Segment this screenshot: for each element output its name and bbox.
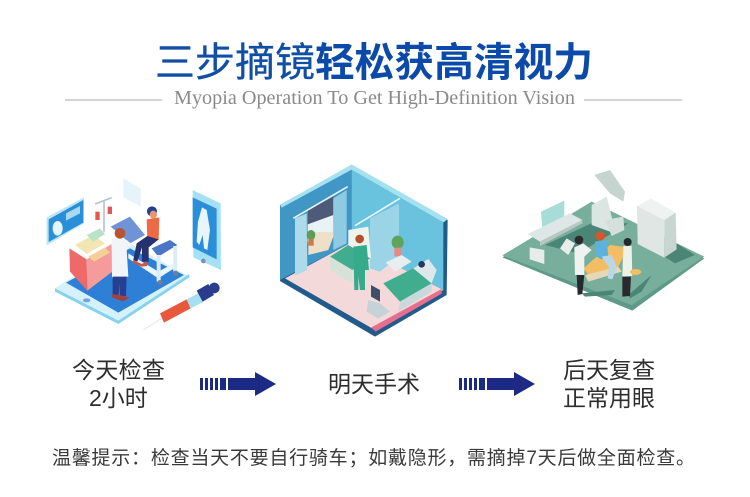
back bed xyxy=(330,227,371,283)
window and curtains xyxy=(293,187,348,276)
tablet base xyxy=(55,242,189,324)
illustration: examination room xyxy=(47,178,221,330)
patient couch xyxy=(111,217,178,285)
patient xyxy=(133,206,159,267)
syringe xyxy=(143,283,220,330)
front bed with patient xyxy=(383,259,437,312)
arrow 2 xyxy=(459,372,535,396)
step label: day after tomorrow: 后天复查 xyxy=(563,357,655,383)
floor platform xyxy=(502,202,704,311)
step label: today: 2小时 xyxy=(89,385,148,411)
reminder note: 温馨提示：检查当天不要自行骑车；如戴隐形，需摘掉7天后做全面检查。 xyxy=(52,447,695,469)
illustration: hospital ward xyxy=(280,164,448,337)
title xyxy=(155,41,593,85)
title: 轻松获高清视力 xyxy=(315,41,593,85)
room shell xyxy=(280,164,448,337)
step label: day after tomorrow xyxy=(563,357,655,411)
step label: tomorrow: 明天手术 xyxy=(328,371,420,397)
doctor xyxy=(112,228,132,301)
desk and monitor xyxy=(528,201,582,264)
floating panel xyxy=(123,178,141,207)
storage cabinet xyxy=(637,198,677,258)
step label: day after tomorrow: 正常用眼 xyxy=(563,385,655,411)
step label: today xyxy=(72,357,165,411)
doctor right xyxy=(622,238,641,297)
illustration: clinic check-up xyxy=(502,170,704,311)
title: 三步摘镜 xyxy=(155,41,315,85)
divider curtain xyxy=(355,198,400,272)
exam table xyxy=(583,245,628,282)
subtitle: Myopia Operation To Get High-Definition Vision xyxy=(174,88,575,109)
ultrasound machine xyxy=(592,170,625,236)
phone screen xyxy=(193,190,221,270)
arrow 1 xyxy=(200,372,276,396)
nurse xyxy=(353,235,369,290)
IV stand xyxy=(95,198,112,232)
red cabinet xyxy=(69,228,112,291)
doctor left xyxy=(574,236,592,295)
seated patient xyxy=(595,231,617,279)
medical monitor xyxy=(367,285,390,318)
left wall screen xyxy=(47,197,84,245)
step label: today: 今天检查 xyxy=(72,357,165,383)
bedside plant xyxy=(386,236,412,272)
